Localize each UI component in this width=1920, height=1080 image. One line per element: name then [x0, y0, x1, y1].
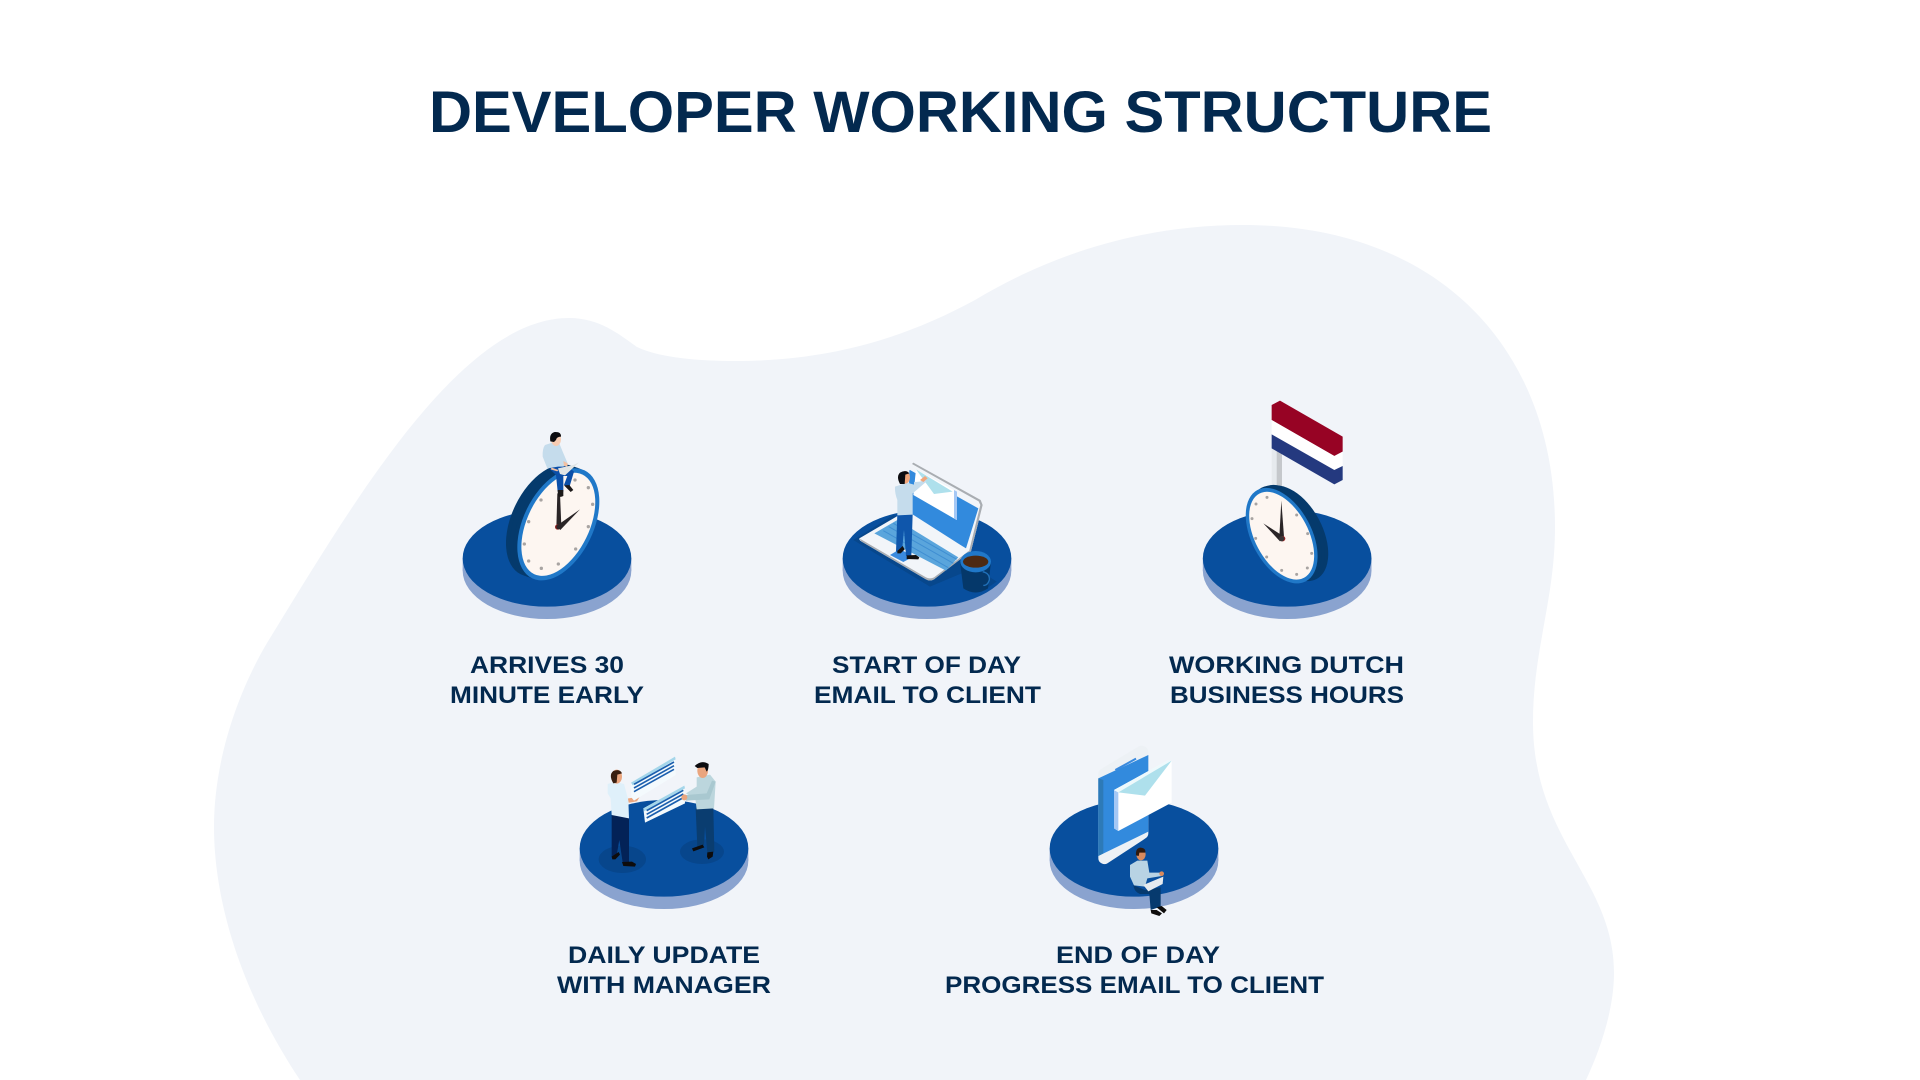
label: ARRIVES 30 — [470, 652, 624, 679]
clock face — [1231, 476, 1332, 595]
title: DEVELOPER WORKING STRUCTURE — [429, 80, 1492, 145]
label: WORKING DUTCH — [1169, 652, 1404, 679]
laptop — [859, 463, 983, 580]
label — [450, 652, 644, 709]
disc — [1203, 510, 1371, 619]
clock face — [501, 455, 616, 594]
label — [557, 942, 771, 999]
man reaching to the screen — [895, 470, 928, 559]
envelope — [1114, 761, 1172, 831]
label: EMAIL TO CLIENT — [814, 682, 1041, 709]
seated person with laptop — [1130, 848, 1167, 916]
icon: two people exchanging messages — [580, 757, 748, 909]
left person — [608, 770, 643, 867]
coffee cup — [960, 551, 991, 592]
disc — [463, 510, 631, 619]
label: WITH MANAGER — [557, 972, 771, 999]
envelope — [913, 469, 957, 520]
panel: end of day progress email to client — [945, 746, 1324, 999]
icon: phone, envelope and seated person — [1050, 746, 1218, 916]
background blob — [214, 225, 1614, 1080]
label — [945, 942, 1324, 999]
phone — [1098, 746, 1148, 864]
disc — [1050, 800, 1218, 909]
man sitting on clock — [543, 432, 579, 497]
label: END OF DAY — [1056, 942, 1220, 969]
panel: arrives 30 minute early — [450, 432, 644, 709]
label: MINUTE EARLY — [450, 682, 644, 709]
panel: daily update with manager — [557, 757, 771, 999]
right person — [681, 762, 716, 859]
label — [814, 652, 1041, 709]
flag pole — [1272, 445, 1282, 490]
icon: laptop, email, man and coffee cup — [843, 463, 1011, 619]
label — [1169, 652, 1404, 709]
label: PROGRESS EMAIL TO CLIENT — [945, 972, 1324, 999]
panel: working dutch business hours — [1169, 401, 1404, 709]
disc — [843, 510, 1011, 619]
label: DAILY UPDATE — [568, 942, 760, 969]
clock body — [1235, 473, 1343, 593]
label: BUSINESS HOURS — [1170, 682, 1404, 709]
disc — [580, 800, 748, 909]
message bubbles — [631, 757, 685, 823]
icon: clock with man on a laptop — [463, 432, 631, 619]
panel: start of day email to client — [814, 463, 1041, 709]
floor shadows — [599, 839, 724, 873]
laptop shadow — [853, 515, 997, 588]
Dutch flag — [1272, 401, 1343, 484]
icon: clock with Dutch flag — [1203, 401, 1371, 619]
clock body — [489, 451, 612, 592]
label: START OF DAY — [832, 652, 1021, 679]
